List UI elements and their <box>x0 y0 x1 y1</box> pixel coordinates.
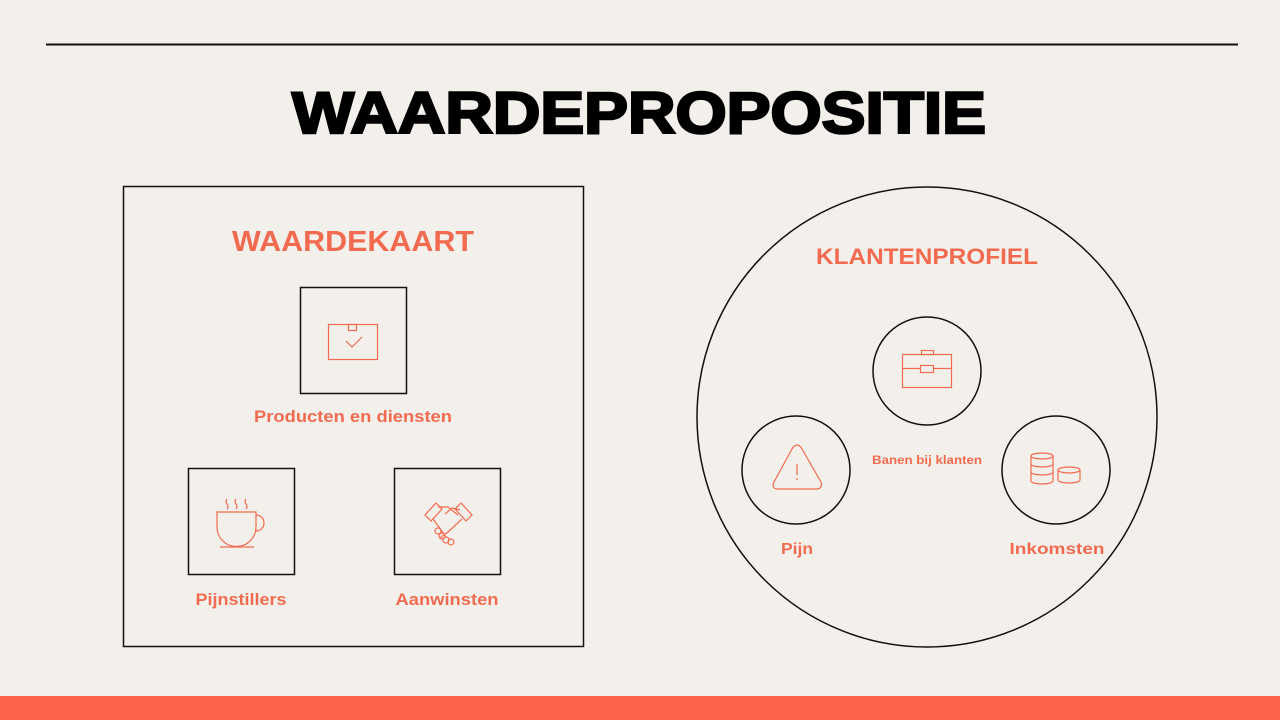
item: producten en diensten <box>254 288 452 426</box>
item: aanwinsten <box>394 468 500 609</box>
bottom bar <box>0 696 1280 720</box>
panel: waardekaart <box>124 186 584 646</box>
icon: warning <box>773 445 821 489</box>
item: banen bij klanten <box>872 317 982 467</box>
panel: klantenprofiel <box>697 187 1157 647</box>
item: banen bij klanten: Banen bij klanten <box>872 453 982 467</box>
icon: handshake <box>425 503 472 545</box>
item: pijnstillers: Pijnstillers <box>196 590 286 609</box>
item: pijnstillers <box>188 468 294 609</box>
item: producten en diensten: Producten en diensten <box>254 407 452 426</box>
icon: box <box>328 324 378 360</box>
icon: briefcase <box>902 350 952 388</box>
item: pijn: Pijn <box>781 541 813 558</box>
heading: klantenprofiel: KLANTENPROFIEL <box>816 244 1038 269</box>
item: inkomsten: Inkomsten <box>1010 541 1104 558</box>
icon: coffee cup <box>217 499 264 547</box>
icon: coins <box>1031 453 1080 484</box>
item: aanwinsten: Aanwinsten <box>396 590 498 609</box>
item: pijn <box>742 416 850 558</box>
title: WAARDEPROPOSITIE <box>292 81 986 146</box>
item: inkomsten <box>1002 416 1110 558</box>
heading: waardekaart: WAARDEKAART <box>232 226 474 258</box>
